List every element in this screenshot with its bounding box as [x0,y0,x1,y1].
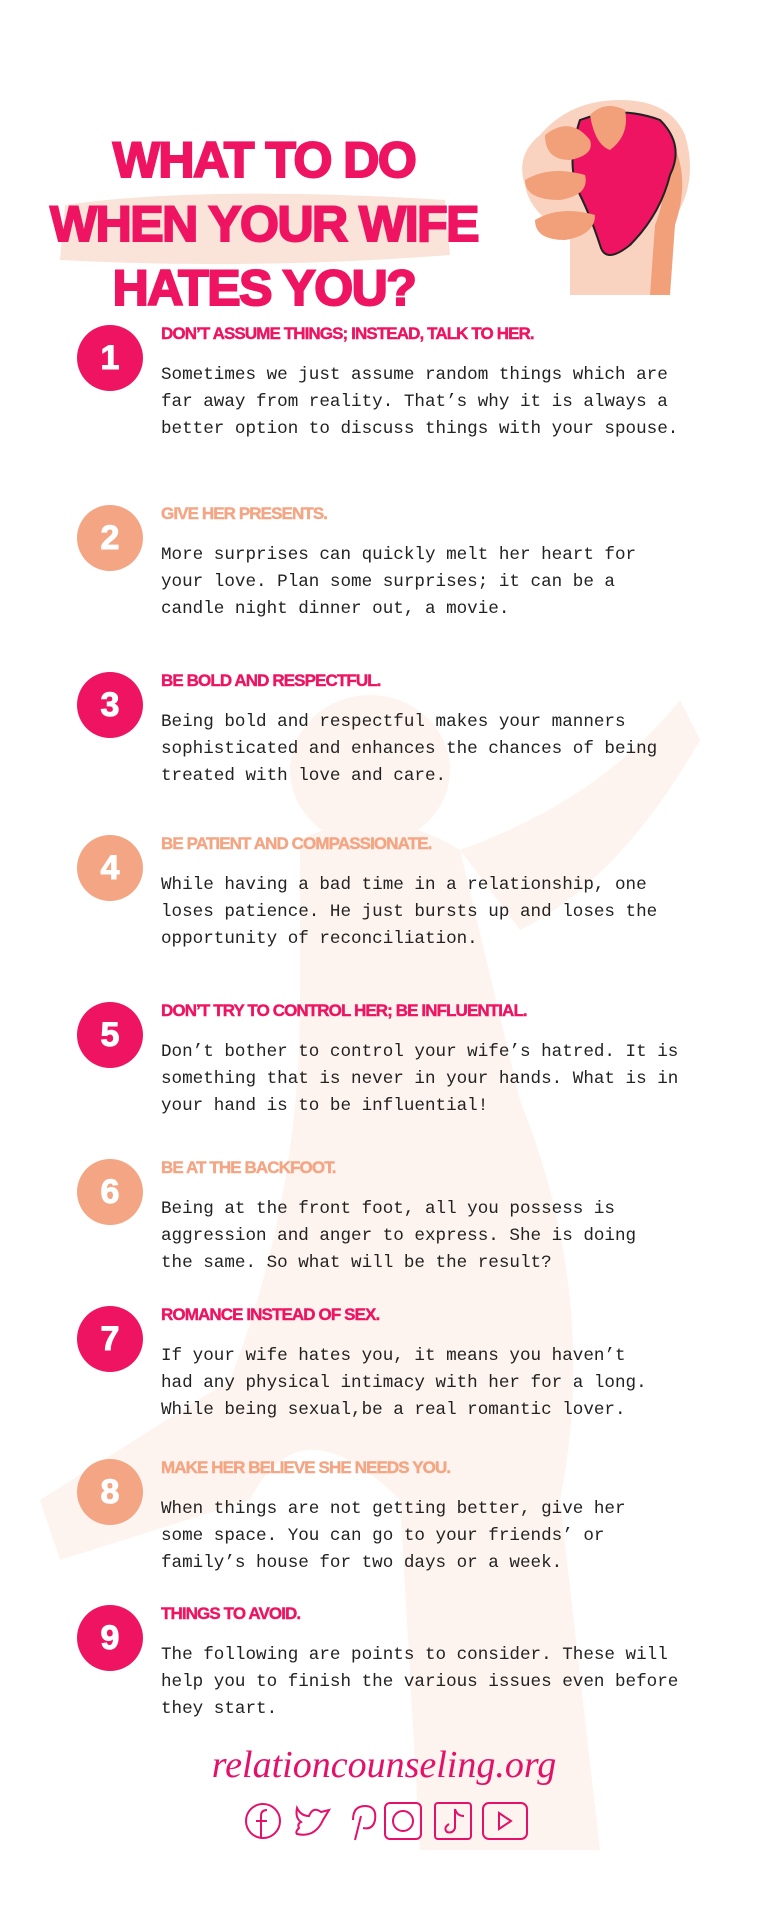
item 5: 5 [101,1016,119,1054]
item 7: 7 [101,1320,119,1358]
item 2 [77,504,636,619]
item 3: Being bold and respectful makes your manners sophisticated and enhances the chances of being treated with love and care. [161,712,657,786]
item 1 [77,324,678,439]
item 6: BE AT THE BACKFOOT. [161,1158,336,1177]
item 1: 1 [101,339,119,377]
item 1: DON’T ASSUME THINGS; INSTEAD, TALK TO HER. [161,324,534,343]
item 8: When things are not getting better, give her some space. You can go to your friends’ or family’s house for two days or a week. [161,1499,626,1573]
item 9: The following are points to consider. These will help you to finish the various issues even before they start. [161,1645,678,1719]
item 3 [77,671,657,786]
item 4 [77,834,657,949]
icon: tiktok [435,1803,471,1839]
item 6: 6 [101,1173,119,1211]
item 9: THINGS TO AVOID. [161,1604,300,1623]
icon: instagram [385,1803,421,1839]
title: WHEN YOUR WIFE [50,196,478,252]
item 2: GIVE HER PRESENTS. [161,504,327,523]
icon: twitter [296,1808,329,1835]
title: WHAT TO DO [113,132,415,188]
item 7: If your wife hates you, it means you haven’t had any physical intimacy with her for a long. While being sexual,be a real romantic lover. [161,1346,647,1420]
website url: relationcounseling.org [212,1744,556,1786]
item 5: Don’t bother to control your wife’s hatred. It is something that is never in your hands. What is in your hand is to be influential! [161,1042,678,1116]
item 3: BE BOLD AND RESPECTFUL. [161,671,381,690]
icon: pinterest [353,1806,375,1840]
item 9 [77,1604,678,1719]
item 4: While having a bad time in a relationship, one loses patience. He just bursts up and loses the opportunity of reconciliation. [161,875,657,949]
item 5 [77,1001,678,1116]
item 4: BE PATIENT AND COMPASSIONATE. [161,834,431,853]
item 8 [77,1458,626,1573]
title [48,132,479,316]
item 4: 4 [101,849,119,887]
item 5: DON’T TRY TO CONTROL HER; BE INFLUENTIAL. [161,1001,527,1020]
social icons [245,1802,528,1840]
item 1: Sometimes we just assume random things which are far away from reality. That’s why it is always a better option to discuss things with your spouse. [161,365,678,439]
item 3: 3 [101,686,119,724]
title: HATES YOU? [113,260,415,316]
item 8: MAKE HER BELIEVE SHE NEEDS YOU. [161,1458,450,1477]
item 7: ROMANCE INSTEAD OF SEX. [161,1305,379,1324]
icon: fist squeezing heart [522,100,690,295]
brush stroke behind title [60,194,450,264]
icon: facebook [246,1804,280,1838]
icon: youtube [483,1803,527,1839]
item 7 [77,1305,647,1420]
item 6 [77,1158,636,1273]
item 9: 9 [101,1619,119,1657]
item 2: More surprises can quickly melt her heart for your love. Plan some surprises; it can be a candle night dinner out, a movie. [161,545,636,619]
item 8: 8 [101,1473,119,1511]
item 2: 2 [101,519,119,557]
item 6: Being at the front foot, all you possess is aggression and anger to express. She is doing the same. So what will be the result? [161,1199,636,1273]
